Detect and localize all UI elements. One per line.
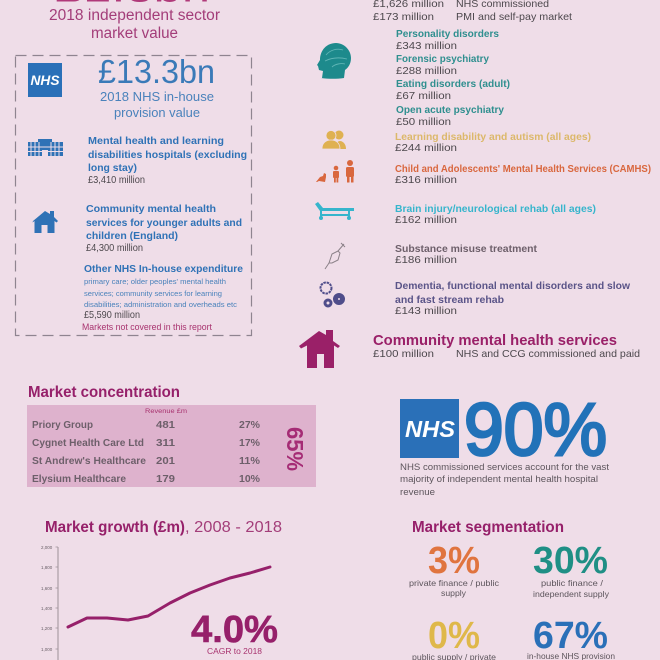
table rows: 10% xyxy=(239,473,261,485)
description: NHS commissioned services account for the vast xyxy=(400,462,609,473)
panel: independent sector market value xyxy=(49,0,220,42)
text: other NHS expenditure: disabilities; administration and overheads etc xyxy=(84,300,237,309)
line chart: 1,800 xyxy=(41,565,53,570)
in-house provision value xyxy=(98,53,215,120)
table rows: 27% xyxy=(239,419,261,431)
line chart: 1,000 xyxy=(41,647,53,652)
description: revenue xyxy=(400,487,435,498)
line chart: 1,400 xyxy=(41,606,53,611)
text: hospitals: long stay) xyxy=(88,162,137,174)
stat: 30%: independent supply xyxy=(533,589,610,599)
icon: gears xyxy=(320,282,342,306)
stat: 0%: 0% xyxy=(428,615,480,657)
table header: Revenue £m xyxy=(145,408,187,415)
table background xyxy=(27,405,316,487)
text: community services: services for younger adults and xyxy=(86,217,242,229)
text: community mental health services: NHS and CCG commissioned and paid xyxy=(456,348,640,360)
text: community services: Community mental health xyxy=(86,203,216,215)
in-house provision value: 2018 NHS in-house xyxy=(100,89,214,104)
text: psychiatry markets: Open acute psychiatry xyxy=(396,104,504,116)
table rows: 311 xyxy=(156,437,175,449)
icon: NHS logo: NHS xyxy=(30,73,60,88)
table rows: 201 xyxy=(156,455,175,467)
big number: 90% xyxy=(464,388,607,471)
line chart: 1,600 xyxy=(41,586,53,591)
heading: , 2008 - 2018 xyxy=(185,519,282,536)
table rows: Priory Group xyxy=(32,419,93,431)
table rows: Elysium Healthcare xyxy=(32,473,126,485)
text: substance misuse xyxy=(395,243,537,266)
description: majority of independent mental health hospital xyxy=(400,474,598,485)
table rows: 17% xyxy=(239,437,261,449)
subtitle: market value xyxy=(91,25,178,42)
text: psychiatry markets: £288 million xyxy=(396,65,457,77)
text: psychiatry markets: Personality disorders xyxy=(396,28,499,40)
table rows: 481 xyxy=(156,419,175,431)
icon: syringe xyxy=(325,243,345,269)
text: other NHS expenditure: services; community services for learning xyxy=(84,289,222,298)
stat: 30%: public finance / xyxy=(541,578,604,588)
text: dementia: Dementia, functional mental disorders and slow xyxy=(395,280,631,292)
text: learning disability: Learning disability and autism (all ages) xyxy=(395,131,591,143)
text: other NHS expenditure: £5,590 million xyxy=(84,309,140,321)
text: dementia: £143 million xyxy=(395,305,457,317)
total share: 65% xyxy=(282,427,308,471)
text: community mental health services: Community mental health services xyxy=(373,332,617,349)
table rows: 11% xyxy=(239,455,261,467)
panel: NHS in-house provision xyxy=(16,53,252,336)
stat: 3%: private finance / public xyxy=(409,578,500,588)
icon: NHS logo xyxy=(28,63,62,97)
text: substance misuse: £186 million xyxy=(395,254,457,266)
text: community mental health services xyxy=(373,332,640,360)
heading: Market growth (£m) xyxy=(45,519,185,536)
text: community services xyxy=(86,203,242,254)
icon: home xyxy=(32,211,58,233)
panel: independent market breakdown xyxy=(299,0,651,368)
text: substance misuse: Substance misuse treatment xyxy=(395,243,537,255)
panel: market growth xyxy=(41,519,282,660)
text: brain injury: £162 million xyxy=(395,214,457,226)
table rows: Cygnet Health Care Ltd xyxy=(32,437,144,449)
text: brain injury: Brain injury/neurological rehab (all ages) xyxy=(395,203,596,215)
icon: brain head xyxy=(317,43,351,79)
icon: family xyxy=(316,160,354,182)
table rows xyxy=(32,419,261,485)
text: psychiatry markets: £343 million xyxy=(396,40,457,52)
icon: people xyxy=(322,130,346,149)
text: CAMHS: £316 million xyxy=(395,174,457,186)
line chart: 1,200 xyxy=(41,626,53,631)
text: hospitals: £3,410 million xyxy=(88,174,145,186)
text: psychiatry markets: £67 million xyxy=(396,90,451,102)
panel: market segmentation xyxy=(409,519,615,660)
text: other NHS expenditure: Other NHS In-house expenditure xyxy=(84,263,243,275)
stat: 67%: 67% xyxy=(533,615,608,657)
line chart: 2,000 xyxy=(41,545,53,550)
icon: NHS logo xyxy=(400,399,459,458)
stat: 30%: 30% xyxy=(533,540,608,582)
text: psychiatry markets: £50 million xyxy=(396,116,451,128)
icon: bed xyxy=(315,202,354,220)
heading xyxy=(45,519,282,536)
stat: 3%: supply xyxy=(441,588,467,598)
in-house provision value: provision value xyxy=(114,105,200,120)
text: commissioning split: £173 million xyxy=(373,11,434,23)
icon: NHS logo: NHS xyxy=(405,416,456,442)
line chart xyxy=(41,545,270,660)
text: community services: children (England) xyxy=(86,230,178,242)
note: Markets not covered in this report xyxy=(82,322,212,332)
text: community mental health services: £100 million xyxy=(373,348,434,360)
table rows: St Andrew's Healthcare xyxy=(32,455,146,467)
text: dementia xyxy=(395,280,631,317)
text: dementia: and fast stream rehab xyxy=(395,294,504,306)
description xyxy=(400,462,609,498)
text: other NHS expenditure xyxy=(84,263,243,321)
heading: Market concentration xyxy=(28,384,180,401)
panel: NHS 90% xyxy=(400,388,609,498)
text: hospitals: Mental health and learning xyxy=(88,135,224,147)
subtitle: 2018 independent sector xyxy=(49,7,220,24)
text: CAMHS xyxy=(395,163,651,186)
stat: 3% xyxy=(409,540,500,598)
stat: 0% xyxy=(412,615,496,660)
CAGR callout: 4.0% xyxy=(191,609,278,651)
text: commissioning split xyxy=(373,0,572,23)
text: hospitals xyxy=(88,135,247,186)
stat: 3%: 3% xyxy=(428,540,480,582)
heading: Market segmentation xyxy=(412,519,564,536)
text: learning disability: £244 million xyxy=(395,142,457,154)
text: hospitals: disabilities hospitals (excluding xyxy=(88,149,247,161)
text: brain injury xyxy=(395,203,596,226)
text: psychiatry markets: Eating disorders (adult) xyxy=(396,78,510,90)
text: learning disability xyxy=(395,131,591,154)
panel: market concentration xyxy=(27,384,316,487)
text: psychiatry markets xyxy=(396,28,510,128)
table rows: 179 xyxy=(156,473,175,485)
icon: large house xyxy=(299,330,340,368)
text: psychiatry markets: Forensic psychiatry xyxy=(396,53,489,65)
in-house provision value: £13.3bn xyxy=(98,53,215,90)
CAGR callout: CAGR to 2018 xyxy=(207,646,262,656)
text: other NHS expenditure: primary care; older peoples' mental health xyxy=(84,277,226,286)
icon: hospital xyxy=(28,139,63,156)
text: commissioning split: PMI and self-pay market xyxy=(456,11,572,23)
text: community services: £4,300 million xyxy=(86,242,143,254)
subtitle xyxy=(49,7,220,42)
